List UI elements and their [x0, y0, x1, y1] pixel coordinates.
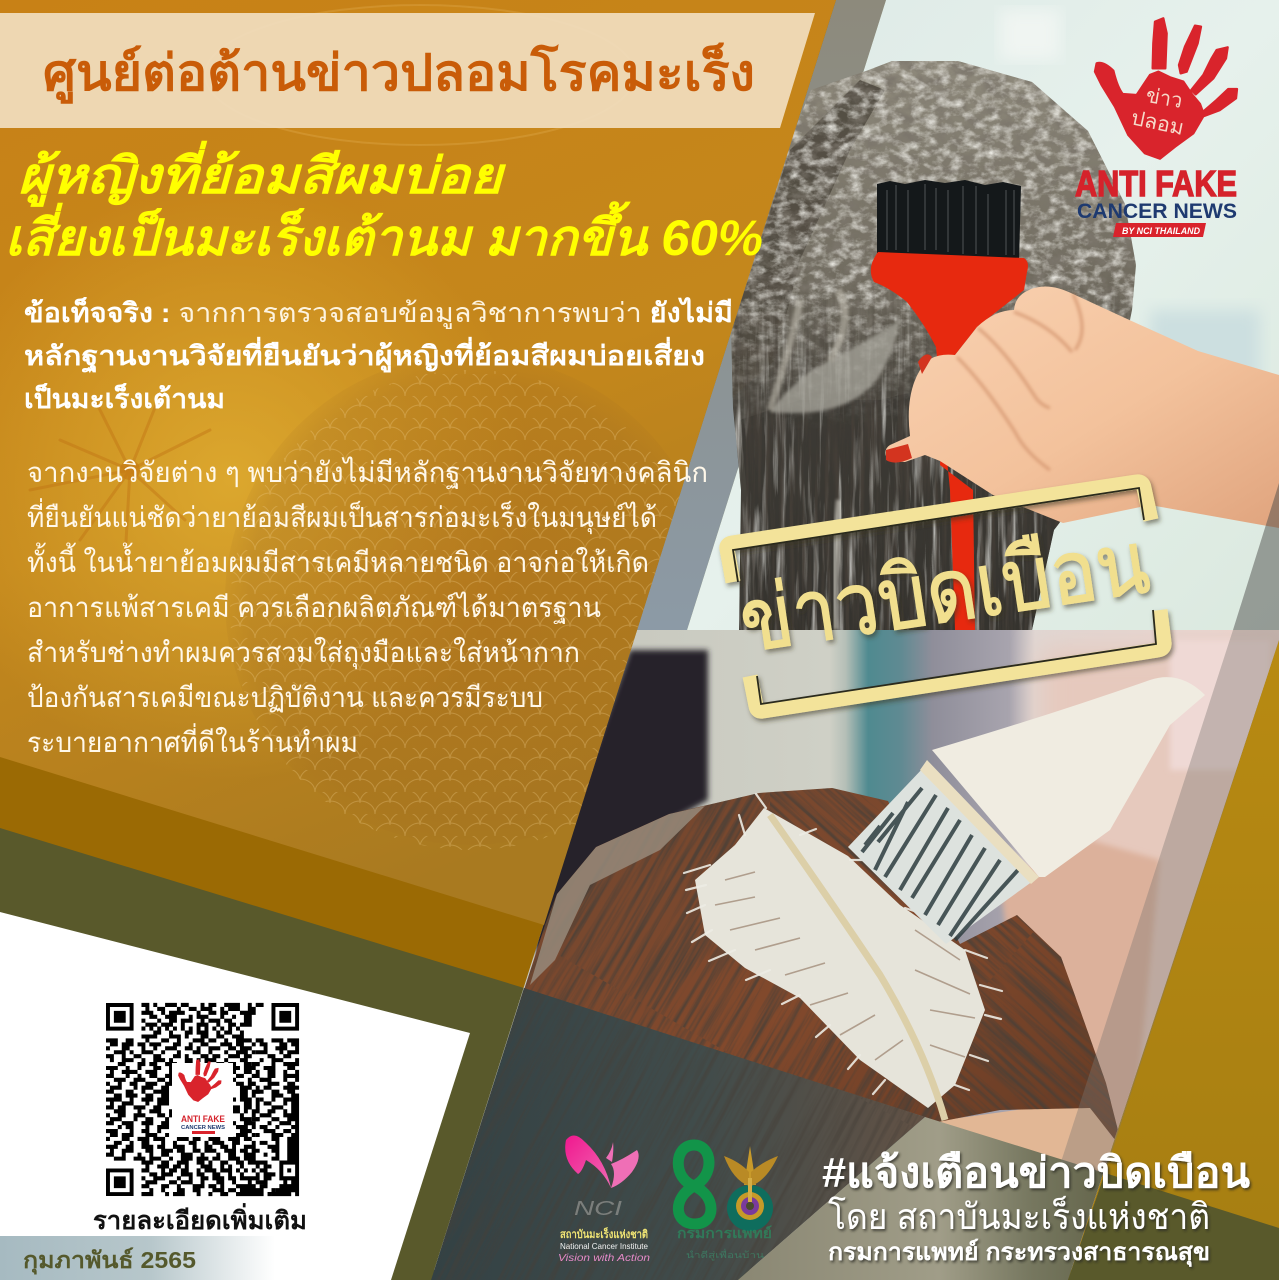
body text: ระบายอากาศที่ดีในร้านทำผม: [27, 723, 358, 758]
stamp top bracket: [727, 482, 1151, 582]
hand behind the head: [1000, 840, 1160, 1170]
body text: ที่ยืนยันแน่ชัดว่ายาย้อมสีผมเป็นสารก่อมะเร็งในมนุษย์ได้: [27, 498, 657, 535]
body text: [27, 457, 708, 758]
logo: National Cancer Institute: สถาบันมะเร็งแห่งชาติ: [560, 1227, 648, 1241]
head of brown hair: [524, 788, 1118, 1139]
logo byline: BY NCI THAILAND: [1122, 226, 1200, 237]
panel: orange textured background: [0, 0, 840, 930]
body text: สำหรับช่างทำผมควรสวมใส่ถุงมือและใส่หน้ากาก: [27, 636, 580, 670]
body text: ป้องกันสารเคมีขณะปฏิบัติงาน และควรมีระบบ: [27, 682, 543, 713]
QR centre logo: [172, 1060, 233, 1137]
lower tinted dark hair: [431, 988, 925, 1280]
logo: Anti Fake Cancer News: [1075, 18, 1237, 237]
fact paragraph: [24, 295, 733, 414]
hand: [885, 286, 1279, 528]
campaign credit: โดย สถาบันมะเร็งแห่งชาติ: [828, 1194, 1210, 1237]
stamp text: ข่าวบิดเบือน: [733, 512, 1155, 671]
icon: red hand print: ปลอม: [1129, 106, 1186, 140]
campaign credit: กรมการแพทย์ กระทรวงสาธารณสุข: [828, 1238, 1210, 1268]
cell outline behind title: [277, 4, 563, 146]
logo: Department of Medical Services 80 years: นำดีสู่เพื่อนบ้าน: [686, 1248, 764, 1261]
headline in yellow: [5, 140, 763, 266]
fact paragraph: เป็นมะเร็งเต้านม: [24, 381, 225, 414]
brush handle white: [932, 677, 1205, 877]
logo: Anti Fake Cancer News: CANCER NEWS: [1077, 200, 1237, 223]
panel: gold corner bottom right: [1068, 640, 1279, 1280]
neck skin: [940, 1110, 1106, 1171]
headline in yellow: ผู้หญิงที่ย้อมสีผมบ่อย: [18, 140, 507, 207]
logo: Department of Medical Services 80 years: กรมการแพทย์: [677, 1225, 772, 1241]
neuron shaped cell: [30, 395, 210, 560]
body text: จากงานวิจัยต่าง ๆ พบว่ายังไม่มีหลักฐานงานวิจัยทางคลินิก: [27, 457, 708, 489]
QR centre logo: CANCER NEWS: [181, 1125, 225, 1131]
icon: red hand print: ข่าว: [1144, 84, 1184, 113]
overlay: translucent grey right strip on lower photo: [1060, 630, 1279, 1173]
panel: white QR card: [0, 912, 470, 1280]
blurred salon background: [420, 630, 1279, 1270]
photo: hair dye being brushed on wet hair: [680, 0, 1279, 635]
icon: caduceus emblem: [724, 1146, 778, 1231]
date band: [0, 1236, 275, 1280]
fact paragraph: ข้อเท็จจริง : จากการตรวจสอบข้อมูลวิชาการพบว่า ยังไม่มี: [24, 295, 733, 329]
campaign credit: #แจ้งเตือนข่าวบิดเบือน: [822, 1149, 1250, 1196]
logo: National Cancer Institute: Vision with Action: [558, 1253, 651, 1264]
hair foam: [725, 50, 1155, 635]
white dye along parting: [684, 794, 1002, 1120]
band: dark amber diagonal band: [0, 0, 836, 988]
title: ศูนย์ต่อต้านข่าวปลอมโรคมะเร็ง: [43, 42, 755, 104]
cancer cell texture: [230, 367, 680, 850]
QR code: [106, 1003, 299, 1196]
campaign credit: [822, 1149, 1250, 1268]
photo background: [680, 0, 1279, 630]
stamp: ข่าวบิดเบือน: [727, 482, 1164, 711]
headline in yellow: เสี่ยงเป็นมะเร็งเต้านม มากขึ้น 60%: [5, 201, 763, 266]
logo: National Cancer Institute: [558, 1135, 651, 1264]
band: olive corner bottom right: [1068, 1173, 1279, 1280]
brush handle: [871, 252, 1028, 630]
date band: กุมภาพันธ์ 2565: [23, 1247, 196, 1275]
overlay: translucent grey right strip on upper photo: [1233, 483, 1279, 630]
brush ferrule and bristles: [848, 760, 1039, 944]
icon: small hand print: [178, 1060, 221, 1102]
brush bristles: [877, 180, 1021, 262]
body text: อาการแพ้สารเคมี ควรเลือกผลิตภัณฑ์ได้มาตรฐาน: [27, 592, 601, 624]
logo wordmark: ANTI FAKE: [1075, 163, 1237, 204]
icon: green figure eight: [678, 1145, 711, 1224]
stamp bottom bracket: [750, 610, 1164, 711]
QR caption: รายละเอียดเพิ่มเติม: [93, 1203, 307, 1235]
photo: brush applying white dye along the parting: [420, 630, 1279, 1280]
logo: Department of Medical Services 80 years: [677, 1145, 778, 1261]
icon: pink butterfly: [565, 1135, 639, 1188]
logo: National Cancer Institute: National Cancer Institute: [560, 1241, 648, 1251]
strip: grey diagonal strip: [637, 0, 886, 630]
header banner: [0, 13, 815, 128]
fact paragraph: หลักฐานงานวิจัยที่ยืนยันว่าผู้หญิงที่ย้อมสีผมบ่อยเสี่ยง: [24, 336, 705, 374]
logo: National Cancer Institute: NCI: [574, 1198, 623, 1220]
body text: ทั้งนี้ ในน้ำยาย้อมผมมีสารเคมีหลายชนิด อาจก่อให้เกิด: [27, 542, 649, 578]
QR centre logo: ANTI FAKE: [181, 1114, 225, 1124]
icon: red hand print: [1095, 18, 1237, 159]
tinted skin area: [738, 1117, 1105, 1280]
